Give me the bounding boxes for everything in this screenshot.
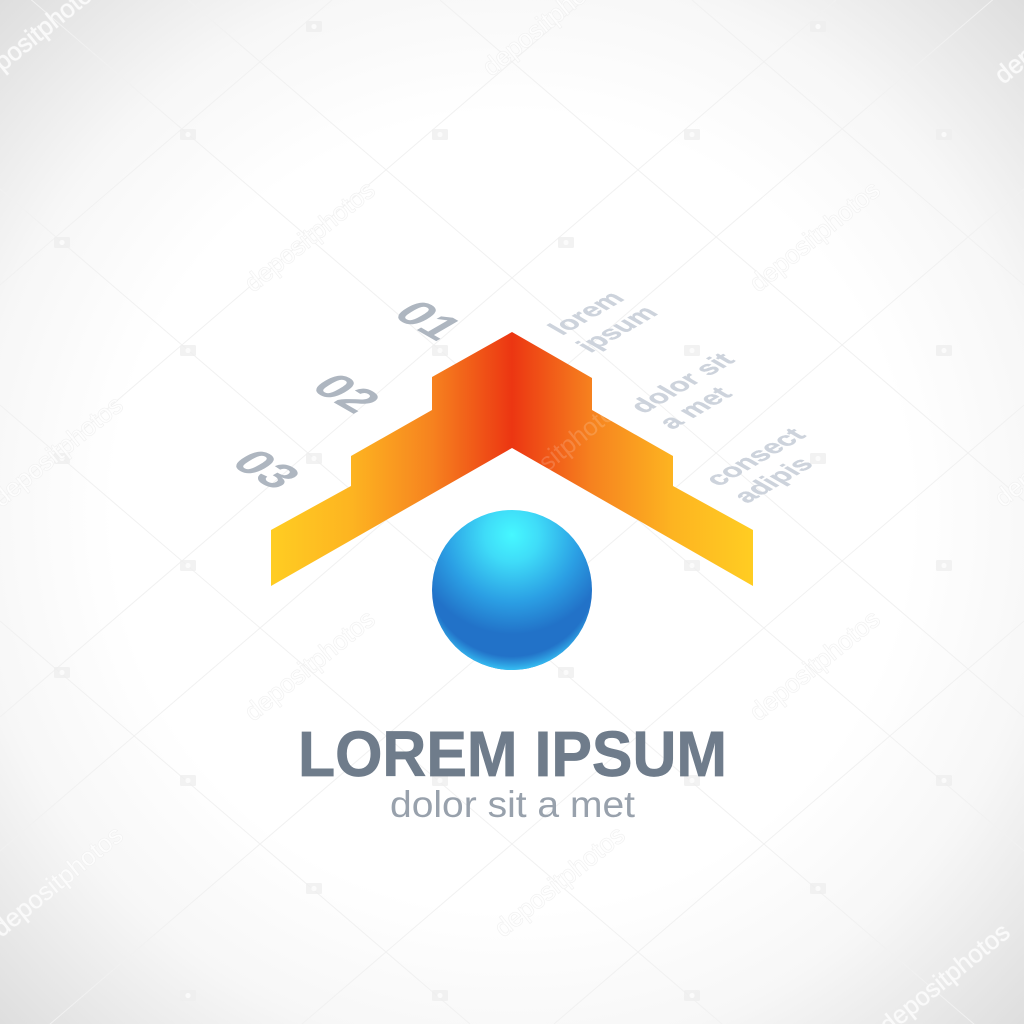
- label: lorem ipsum: lorem: [541, 287, 631, 339]
- watermark text: depositphotos: [744, 605, 885, 727]
- number 02: 02: [300, 367, 392, 420]
- roof watermark overlay: depositphotos: [489, 391, 630, 513]
- label: consect adipis: adipis: [726, 453, 820, 507]
- label: lorem ipsum: [541, 287, 664, 356]
- watermark text: depositphotos: [239, 605, 380, 727]
- label: dolor sit a met: dolor sit: [623, 349, 741, 417]
- blue sphere: [432, 510, 592, 670]
- title: LOREM IPSUM: [298, 718, 727, 790]
- step labels: [541, 287, 820, 507]
- number 03: 03: [220, 443, 312, 496]
- roof chevron with steps: [271, 332, 753, 586]
- label: consect adipis: consect: [698, 424, 812, 490]
- watermark text: depositphotos: [489, 821, 630, 943]
- step numbers: [220, 294, 474, 496]
- label: lorem ipsum: ipsum: [570, 302, 664, 356]
- watermark text: depositphotos: [744, 176, 885, 298]
- label: dolor sit a met: a met: [651, 383, 739, 433]
- number 01: 01: [382, 294, 474, 347]
- subtitle: dolor sit a met: [390, 784, 636, 825]
- watermark text: depositphotos: [239, 176, 380, 298]
